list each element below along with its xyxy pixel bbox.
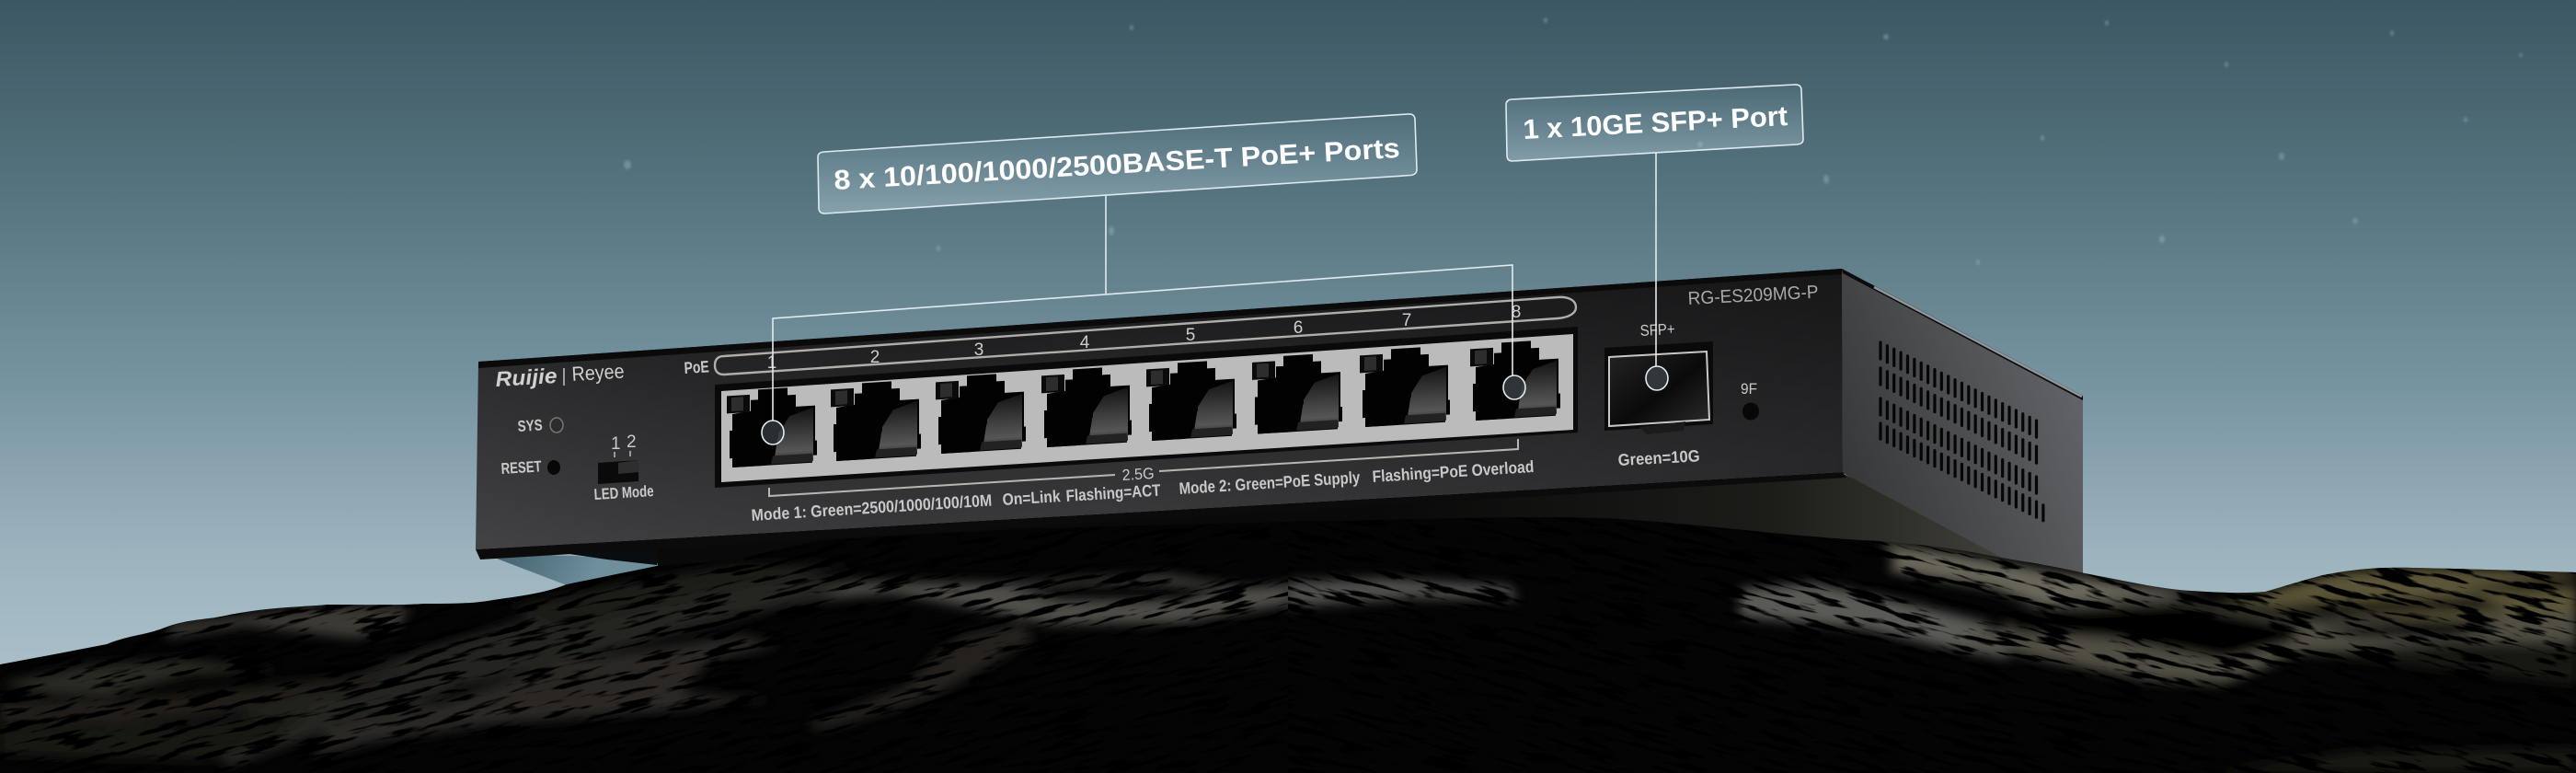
PoE label and bar [684, 297, 1576, 377]
LED legend text: Mode 1: Green=2500/1000/100/10M [751, 491, 993, 525]
switch: underside [485, 473, 2047, 598]
connector: SFP+ marker [1646, 153, 1668, 390]
brand logo: Ruijie [495, 363, 558, 391]
PoE label and bar: 2 [870, 348, 880, 367]
port 4 [1041, 365, 1132, 447]
LED mode switch: 1 [611, 434, 621, 454]
brand logo: Reyee [571, 360, 625, 386]
port 1 [727, 386, 817, 467]
LED mode switch [593, 433, 654, 503]
port 7 [1360, 345, 1450, 427]
9F hole: 9F [1741, 380, 1757, 398]
LED legend text: Flashing=PoE Overload [1372, 457, 1535, 486]
2.5G bracket: 2.5G [1121, 465, 1155, 484]
PoE label and bar: 3 [974, 340, 983, 360]
port 3 [936, 372, 1026, 454]
LED legend text: Mode 2: Green=PoE Supply [1179, 468, 1361, 498]
SFP+ port: Green=10G [1617, 446, 1700, 469]
SFP+ port: SFP+ [1639, 320, 1675, 340]
callout: 8 ports: 8 x 10/100/1000/2500BASE-T PoE+ Ports [834, 133, 1400, 196]
PoE label and bar: PoE [684, 357, 709, 377]
connector: ports bracket with markers [762, 196, 1525, 444]
callout: SFP+ port [1506, 85, 1803, 161]
LED mode switch: 2 [627, 433, 637, 452]
PoE label and bar: 5 [1186, 326, 1195, 345]
switch: front panel [476, 269, 1846, 560]
LED legend text: Flashing=ACT [1065, 481, 1161, 505]
brand logo [495, 360, 625, 391]
callout: 8 ports [818, 114, 1417, 213]
SFP+ port [1604, 320, 1713, 469]
SYS indicator [517, 416, 563, 435]
PoE label and bar: 1 [767, 353, 776, 373]
PoE label and bar: 6 [1294, 318, 1303, 338]
switch: side panel with vents [1842, 269, 2083, 589]
2.5G bracket [769, 439, 1518, 496]
PoE label and bar: 7 [1402, 311, 1411, 330]
port 2 [831, 379, 921, 461]
stars [624, 17, 2523, 265]
vents: four rows of slots [1880, 342, 2043, 521]
port 5 [1146, 359, 1236, 441]
LED legend text: On=Link [1002, 487, 1062, 509]
PoE label and bar: 4 [1080, 333, 1090, 352]
model name: RG-ES209MG-P [1687, 283, 1819, 309]
rocky hill [0, 497, 2576, 773]
PoE label and bar: 8 [1512, 303, 1521, 322]
port 8 [1470, 339, 1560, 421]
callout: SFP+ port: 1 x 10GE SFP+ Port [1523, 101, 1788, 145]
port 6 [1252, 352, 1342, 434]
LED mode switch: LED Mode [593, 482, 654, 503]
SYS indicator: SYS [517, 416, 543, 435]
port panel [715, 327, 1578, 488]
LED legend text [751, 457, 1535, 525]
RESET button: RESET [500, 457, 543, 478]
9F hole [1741, 380, 1759, 420]
